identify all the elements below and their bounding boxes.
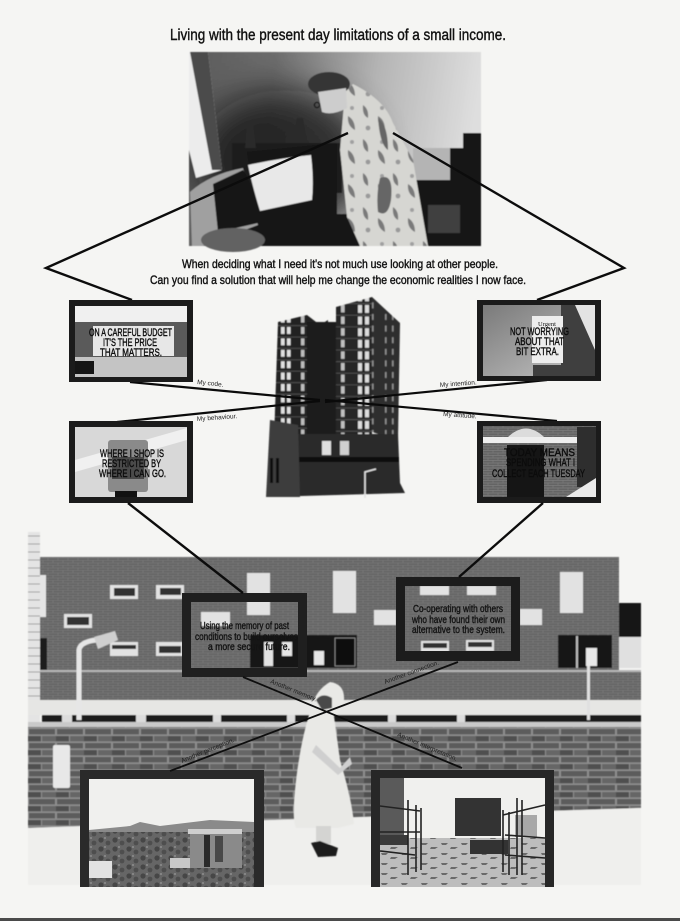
photo: tower block — [266, 297, 405, 498]
windows — [64, 571, 583, 656]
caption: When deciding what I need it's not much use looking at other people. — [182, 257, 498, 271]
text — [510, 321, 569, 358]
balcony band — [28, 700, 641, 715]
text: IT'S THE PRICE — [103, 337, 157, 349]
text: Co-operating with others — [413, 603, 503, 615]
panel: demolition site photo — [371, 770, 554, 887]
text: BIT EXTRA. — [516, 346, 559, 358]
photo: elderly woman walking — [294, 682, 354, 857]
text: who have found their own — [411, 614, 505, 626]
text — [195, 620, 298, 653]
gates — [380, 798, 545, 875]
text — [411, 603, 505, 636]
connecting lines: four views to tower — [117, 380, 557, 422]
label: another connection: Another connection. — [383, 659, 440, 686]
text — [89, 327, 172, 359]
panel: allotment photo — [80, 770, 264, 887]
woman's head — [308, 72, 350, 113]
connecting lines: central cross — [170, 662, 462, 771]
dark floor area — [205, 214, 420, 246]
lamp posts — [79, 631, 597, 720]
label: my code: My code. — [197, 379, 224, 389]
armchair — [190, 168, 258, 246]
left building sliver — [28, 532, 40, 722]
frame: memory of past conditions — [182, 593, 307, 677]
label: my attitude: My attitude. — [443, 411, 477, 420]
label: another interpretation: Another interpretation. — [396, 731, 458, 763]
text: conditions to build ourselves — [195, 631, 298, 643]
text: RESTRICTED BY — [102, 458, 161, 470]
cushion — [201, 228, 265, 252]
connecting lines: top triangle — [46, 133, 624, 300]
text: Urgent — [538, 321, 556, 328]
bottom edge — [0, 918, 680, 921]
panel: not worrying — [477, 300, 601, 381]
label: another memory: Another memory. — [269, 678, 318, 703]
photo: housing estate — [28, 532, 641, 885]
title: Living with the present day limitations of a small income. — [170, 27, 506, 44]
woman's dress — [340, 84, 428, 246]
text: NOT WORRYING — [510, 326, 569, 338]
text: alternative to the system. — [412, 624, 505, 636]
text: WHERE I CAN GO. — [99, 468, 166, 480]
connecting lines: views to frames — [128, 503, 543, 593]
brick facade — [40, 557, 619, 670]
television — [247, 143, 337, 225]
frame: co-operating with others — [396, 577, 520, 661]
label: another perception: Another perception. — [180, 737, 236, 765]
text — [492, 447, 585, 480]
photo: woman looking at television — [189, 52, 481, 252]
label: my intention: My intention. — [440, 379, 477, 389]
panel: careful budget — [69, 300, 193, 382]
text: Using the memory of past — [200, 620, 289, 632]
text: ON A CAREFUL BUDGET — [89, 327, 172, 339]
text: ABOUT THAT — [515, 336, 564, 348]
label: my behaviour: My behaviour. — [197, 413, 238, 423]
doors — [250, 635, 357, 668]
meter box — [53, 745, 70, 788]
caption: Can you find a solution that will help me change the economic realities I now face. — [150, 273, 526, 287]
curtain — [189, 52, 222, 178]
shed — [89, 829, 242, 878]
caption — [150, 257, 526, 287]
panel: restricted shopping — [69, 421, 193, 503]
text: TODAY MEANS — [504, 447, 575, 459]
text: THAT MATTERS. — [100, 347, 162, 359]
text: COLLECT EACH TUESDAY — [492, 468, 585, 480]
ornaments — [245, 118, 307, 148]
pavement — [28, 808, 641, 885]
brick wall — [28, 727, 641, 828]
text: SPENDING WHAT I — [506, 457, 575, 469]
right furniture — [413, 133, 481, 246]
text: a more secure future. — [208, 641, 290, 653]
sideboard — [232, 143, 342, 193]
tower base — [267, 434, 405, 497]
text: WHERE I SHOP IS — [100, 448, 164, 460]
text — [99, 448, 166, 480]
panel: attitude doorway — [477, 421, 601, 503]
